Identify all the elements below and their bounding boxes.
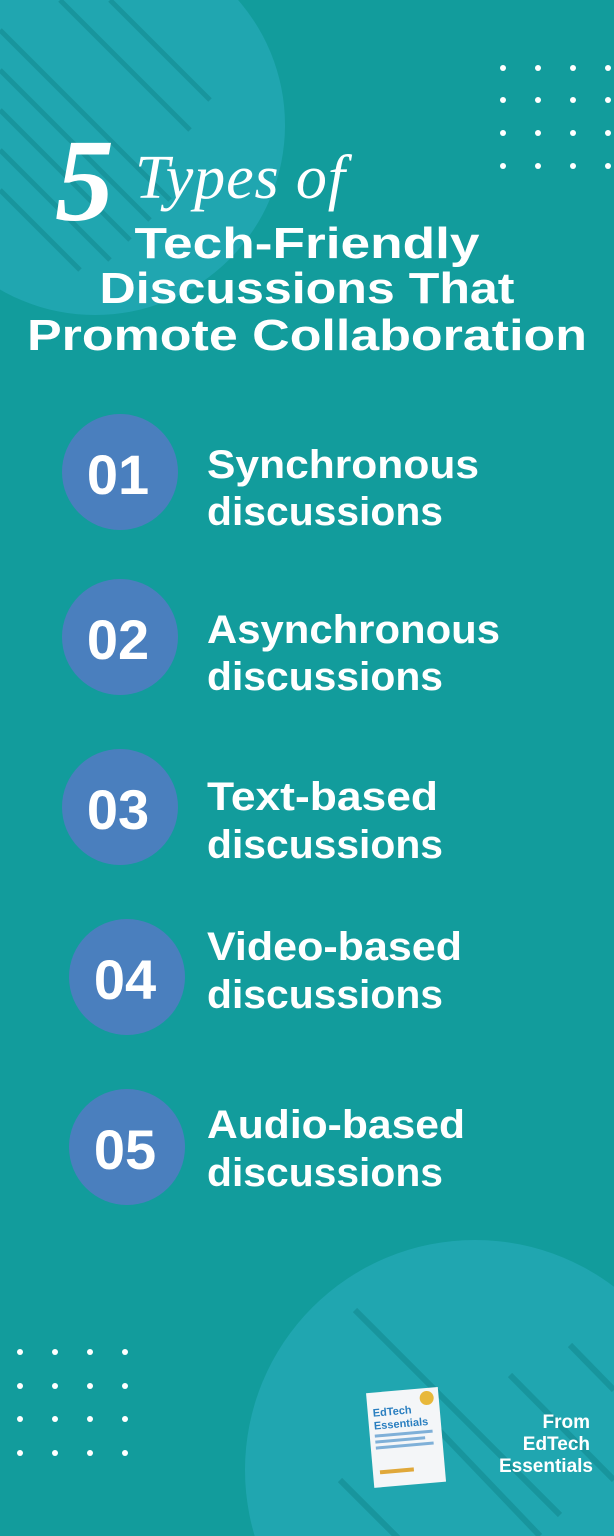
title: Discussions That: [100, 264, 515, 313]
dot grid bottom-left: [17, 1349, 128, 1456]
credit text: From: [542, 1412, 590, 1433]
item 02: Asynchronous: [207, 608, 500, 652]
item 02: [62, 579, 500, 699]
book cover: [366, 1387, 446, 1488]
item 01: discussions: [207, 490, 443, 534]
book cover: Essentials: [373, 1416, 429, 1433]
credit text: EdTech: [523, 1434, 590, 1455]
title: Tech-Friendly: [134, 219, 480, 268]
item 04: [69, 919, 462, 1035]
decorative circle bottom-right: [245, 1240, 614, 1536]
title: Promote Collaboration: [27, 311, 587, 360]
decorative circle top-left: [0, 0, 285, 315]
item 04: discussions: [207, 973, 443, 1017]
item 01: Synchronous: [207, 443, 479, 487]
item 04: Video-based: [207, 925, 462, 969]
item 02: 02: [87, 608, 149, 671]
item 03: discussions: [207, 823, 443, 867]
item 05: 05: [94, 1118, 156, 1181]
item 01: [62, 414, 479, 534]
item 01: 01: [87, 443, 149, 506]
title: Types of: [135, 144, 353, 212]
item 05: discussions: [207, 1151, 443, 1195]
dot grid top-right: [500, 65, 611, 169]
item 03: [62, 749, 443, 867]
credit text: Essentials: [499, 1456, 593, 1477]
item 05: [69, 1089, 465, 1205]
title: [27, 115, 587, 360]
book cover: EdTech: [372, 1404, 412, 1420]
item 03: Text-based: [207, 775, 438, 819]
title: 5: [55, 115, 114, 246]
credit text: [499, 1412, 593, 1477]
item 04: 04: [94, 948, 156, 1011]
item 03: 03: [87, 778, 149, 841]
item 05: Audio-based: [207, 1103, 465, 1147]
item 02: discussions: [207, 655, 443, 699]
